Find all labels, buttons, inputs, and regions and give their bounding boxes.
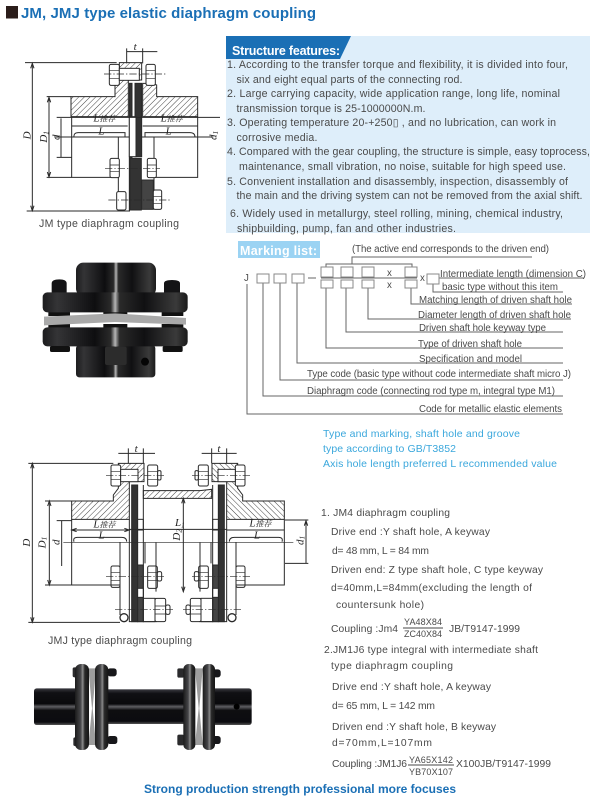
technical drawing: JMJ coupling bbox=[21, 443, 308, 622]
text block: example 2 bbox=[324, 645, 551, 777]
labels: Type of driven shaft hole bbox=[418, 339, 522, 350]
text block: feature list: 1. According to the transfer torque and flexibility, it is divided into four, bbox=[227, 59, 568, 71]
diagram: marking code tree bbox=[244, 244, 586, 415]
text block: example 1: Driven end: Z type shaft hole, C type keyway bbox=[331, 565, 544, 576]
technical drawing: JMJ coupling: 1 bbox=[40, 537, 49, 540]
text block: example 1: JB/T9147-1999 bbox=[449, 624, 520, 635]
text block: feature list: maintenance, small vibration, no noise, suitable for high speed use. bbox=[239, 161, 566, 173]
technical drawing: JMJ coupling: D bbox=[171, 533, 183, 541]
technical drawing: JM coupling bbox=[22, 41, 220, 211]
technical drawing: JM coupling: L bbox=[165, 125, 172, 137]
footer slogan: Strong production strength professional more focuses bbox=[144, 782, 456, 796]
technical drawing: JMJ coupling: d bbox=[294, 539, 306, 545]
diagram: marking code tree: x bbox=[387, 280, 392, 291]
text block: feature list: 3. Operating temperature 20-+250▯ , and no lubrication, can work in bbox=[227, 117, 556, 129]
technical drawing: JM coupling: D bbox=[22, 131, 34, 140]
technical drawing: JM coupling: L推荐 bbox=[160, 113, 185, 125]
labels: Diaphragm code (connecting rod type m, integral type M1) bbox=[307, 386, 555, 397]
technical drawing: JMJ coupling: L bbox=[253, 529, 260, 541]
technical drawing: JM coupling: D bbox=[38, 135, 50, 143]
text block: feature list: transmission torque is 25-1000000N.m. bbox=[236, 103, 426, 115]
technical drawing: JM coupling: L bbox=[97, 125, 104, 137]
text block: example 2: Coupling :JM1J6 bbox=[332, 759, 407, 770]
code boxes bbox=[257, 267, 439, 288]
labels: basic type without this item bbox=[442, 282, 558, 293]
text block: feature list: corrosive media. bbox=[236, 132, 318, 144]
text block: example 2: type diaphragm coupling bbox=[331, 661, 453, 672]
labels: Driven shaft hole keyway type bbox=[419, 323, 546, 334]
text block: example 2: X100JB/T9147-1999 bbox=[456, 759, 551, 770]
text block: example 2: 2.JM1J6 type integral with intermediate shaft bbox=[324, 645, 538, 656]
text block: standards note: Axis hole length preferred L recommended value bbox=[323, 458, 557, 470]
technical drawing: JMJ coupling: L bbox=[98, 529, 105, 541]
technical drawing: JM coupling: L推荐 bbox=[92, 113, 117, 125]
technical drawing: JMJ coupling: 2 bbox=[174, 529, 183, 533]
diagram: marking code tree: x bbox=[420, 273, 425, 284]
text block: example 2: d= 65 mm, L = 142 mm bbox=[332, 701, 435, 712]
text block: example 1: d=40mm,L=84mm(excluding the length of bbox=[331, 583, 532, 594]
technical drawing: JMJ coupling: t bbox=[135, 443, 139, 455]
text block: example 1: 1. JM4 diaphragm coupling bbox=[321, 508, 450, 519]
connector lines bbox=[247, 257, 584, 414]
text block: feature list: 5. Convenient installation and disassembly, inspection, disassembly of bbox=[227, 176, 568, 188]
diagram: marking code tree: x bbox=[387, 268, 392, 279]
technical drawing: JMJ coupling: L bbox=[175, 517, 181, 529]
technical drawing: JMJ coupling: D bbox=[36, 540, 48, 548]
technical drawing: JM coupling: d bbox=[208, 134, 220, 140]
photo: JM coupling bbox=[43, 263, 188, 377]
text block: example 2: Drive end :Y shaft hole, A keyway bbox=[332, 682, 492, 693]
caption: JMJ type: JMJ type diaphragm coupling bbox=[48, 635, 192, 647]
heading: structure features bbox=[226, 36, 351, 59]
technical drawing: JM coupling: d bbox=[50, 134, 62, 140]
labels: Intermediate length (dimension C) bbox=[440, 269, 586, 280]
icon: title square bbox=[6, 6, 18, 18]
heading: structure features: Structure features: bbox=[232, 44, 340, 58]
caption: JM type: JM type diaphragm coupling bbox=[39, 218, 179, 230]
technical drawing: JM coupling: 1 bbox=[211, 131, 220, 134]
text block: example 1 bbox=[321, 508, 544, 639]
technical drawing: JMJ coupling: D bbox=[21, 539, 33, 548]
text block: example 1: countersunk hole) bbox=[336, 600, 424, 611]
technical drawing: JMJ coupling: t bbox=[217, 443, 221, 455]
text block: standards note: Type and marking, shaft hole and groove bbox=[323, 428, 520, 440]
title: JM, JMJ type elastic diaphragm coupling bbox=[21, 5, 316, 22]
text block: example 2: YB70X107 bbox=[409, 767, 453, 777]
labels: Code for metallic elastic elements bbox=[419, 404, 562, 415]
text block: feature list: 4. Compared with the gear coupling, the structure is simple, easy toprocess, bbox=[227, 146, 590, 158]
technical drawing: JMJ coupling: L推荐 bbox=[248, 518, 273, 530]
technical drawing: JMJ coupling: L推荐 bbox=[92, 518, 117, 530]
text block: example 2: YA65X142 bbox=[409, 755, 453, 765]
text block: example 1: YA48X84 bbox=[404, 617, 442, 627]
technical drawing: JM coupling: t bbox=[134, 41, 138, 53]
text block: example 1: Drive end :Y shaft hole, A keyway bbox=[331, 527, 491, 538]
text block: feature list: six and eight equal parts of the connecting rod. bbox=[236, 74, 462, 86]
text block: feature list: the main and the driving system can not be removed from the axial shift. bbox=[236, 190, 582, 202]
technical drawing: JMJ coupling: 1 bbox=[298, 536, 307, 539]
text block: feature list: shipbuilding, pump, fan and other industries. bbox=[237, 223, 456, 235]
text block: feature list: 2. Large carrying capacity, wide application range, long life, nominal bbox=[227, 88, 560, 100]
panel: structure features bbox=[226, 36, 590, 235]
photo: JMJ coupling bbox=[34, 664, 252, 750]
labels: (The active end corresponds to the driven end) bbox=[352, 244, 549, 255]
technical drawing: JM coupling: 1 bbox=[41, 131, 50, 135]
text block: example 1: ZC40X84 bbox=[404, 629, 442, 639]
labels bbox=[307, 244, 586, 415]
labels: Diameter length of driven shaft hole bbox=[418, 310, 571, 321]
diagram: marking code tree: J bbox=[244, 273, 249, 284]
technical drawing: JMJ coupling: 1 bbox=[181, 520, 185, 529]
text block: feature list: 6. Widely used in metallurgy, steel rolling, mining, chemical industry, bbox=[230, 208, 563, 220]
text block: example 1: Coupling :Jm4 bbox=[331, 624, 398, 635]
text block: feature list bbox=[227, 59, 590, 235]
heading: marking list: Marking list: bbox=[240, 244, 317, 258]
labels: Type code (basic type without code intermediate shaft micro J) bbox=[307, 369, 571, 380]
text block: standards note: type according to GB/T3852 bbox=[323, 443, 456, 455]
labels: Specification and model bbox=[419, 354, 522, 365]
text block: example 1: d= 48 mm, L = 84 mm bbox=[332, 546, 429, 557]
technical drawing: JMJ coupling: d bbox=[50, 539, 62, 545]
labels: Matching length of driven shaft hole bbox=[419, 295, 572, 306]
text block: example 2: Driven end :Y shaft hole, B keyway bbox=[332, 722, 497, 733]
text block: standards note bbox=[323, 428, 557, 470]
text block: example 2: d=70mm,L=107mm bbox=[332, 738, 432, 749]
